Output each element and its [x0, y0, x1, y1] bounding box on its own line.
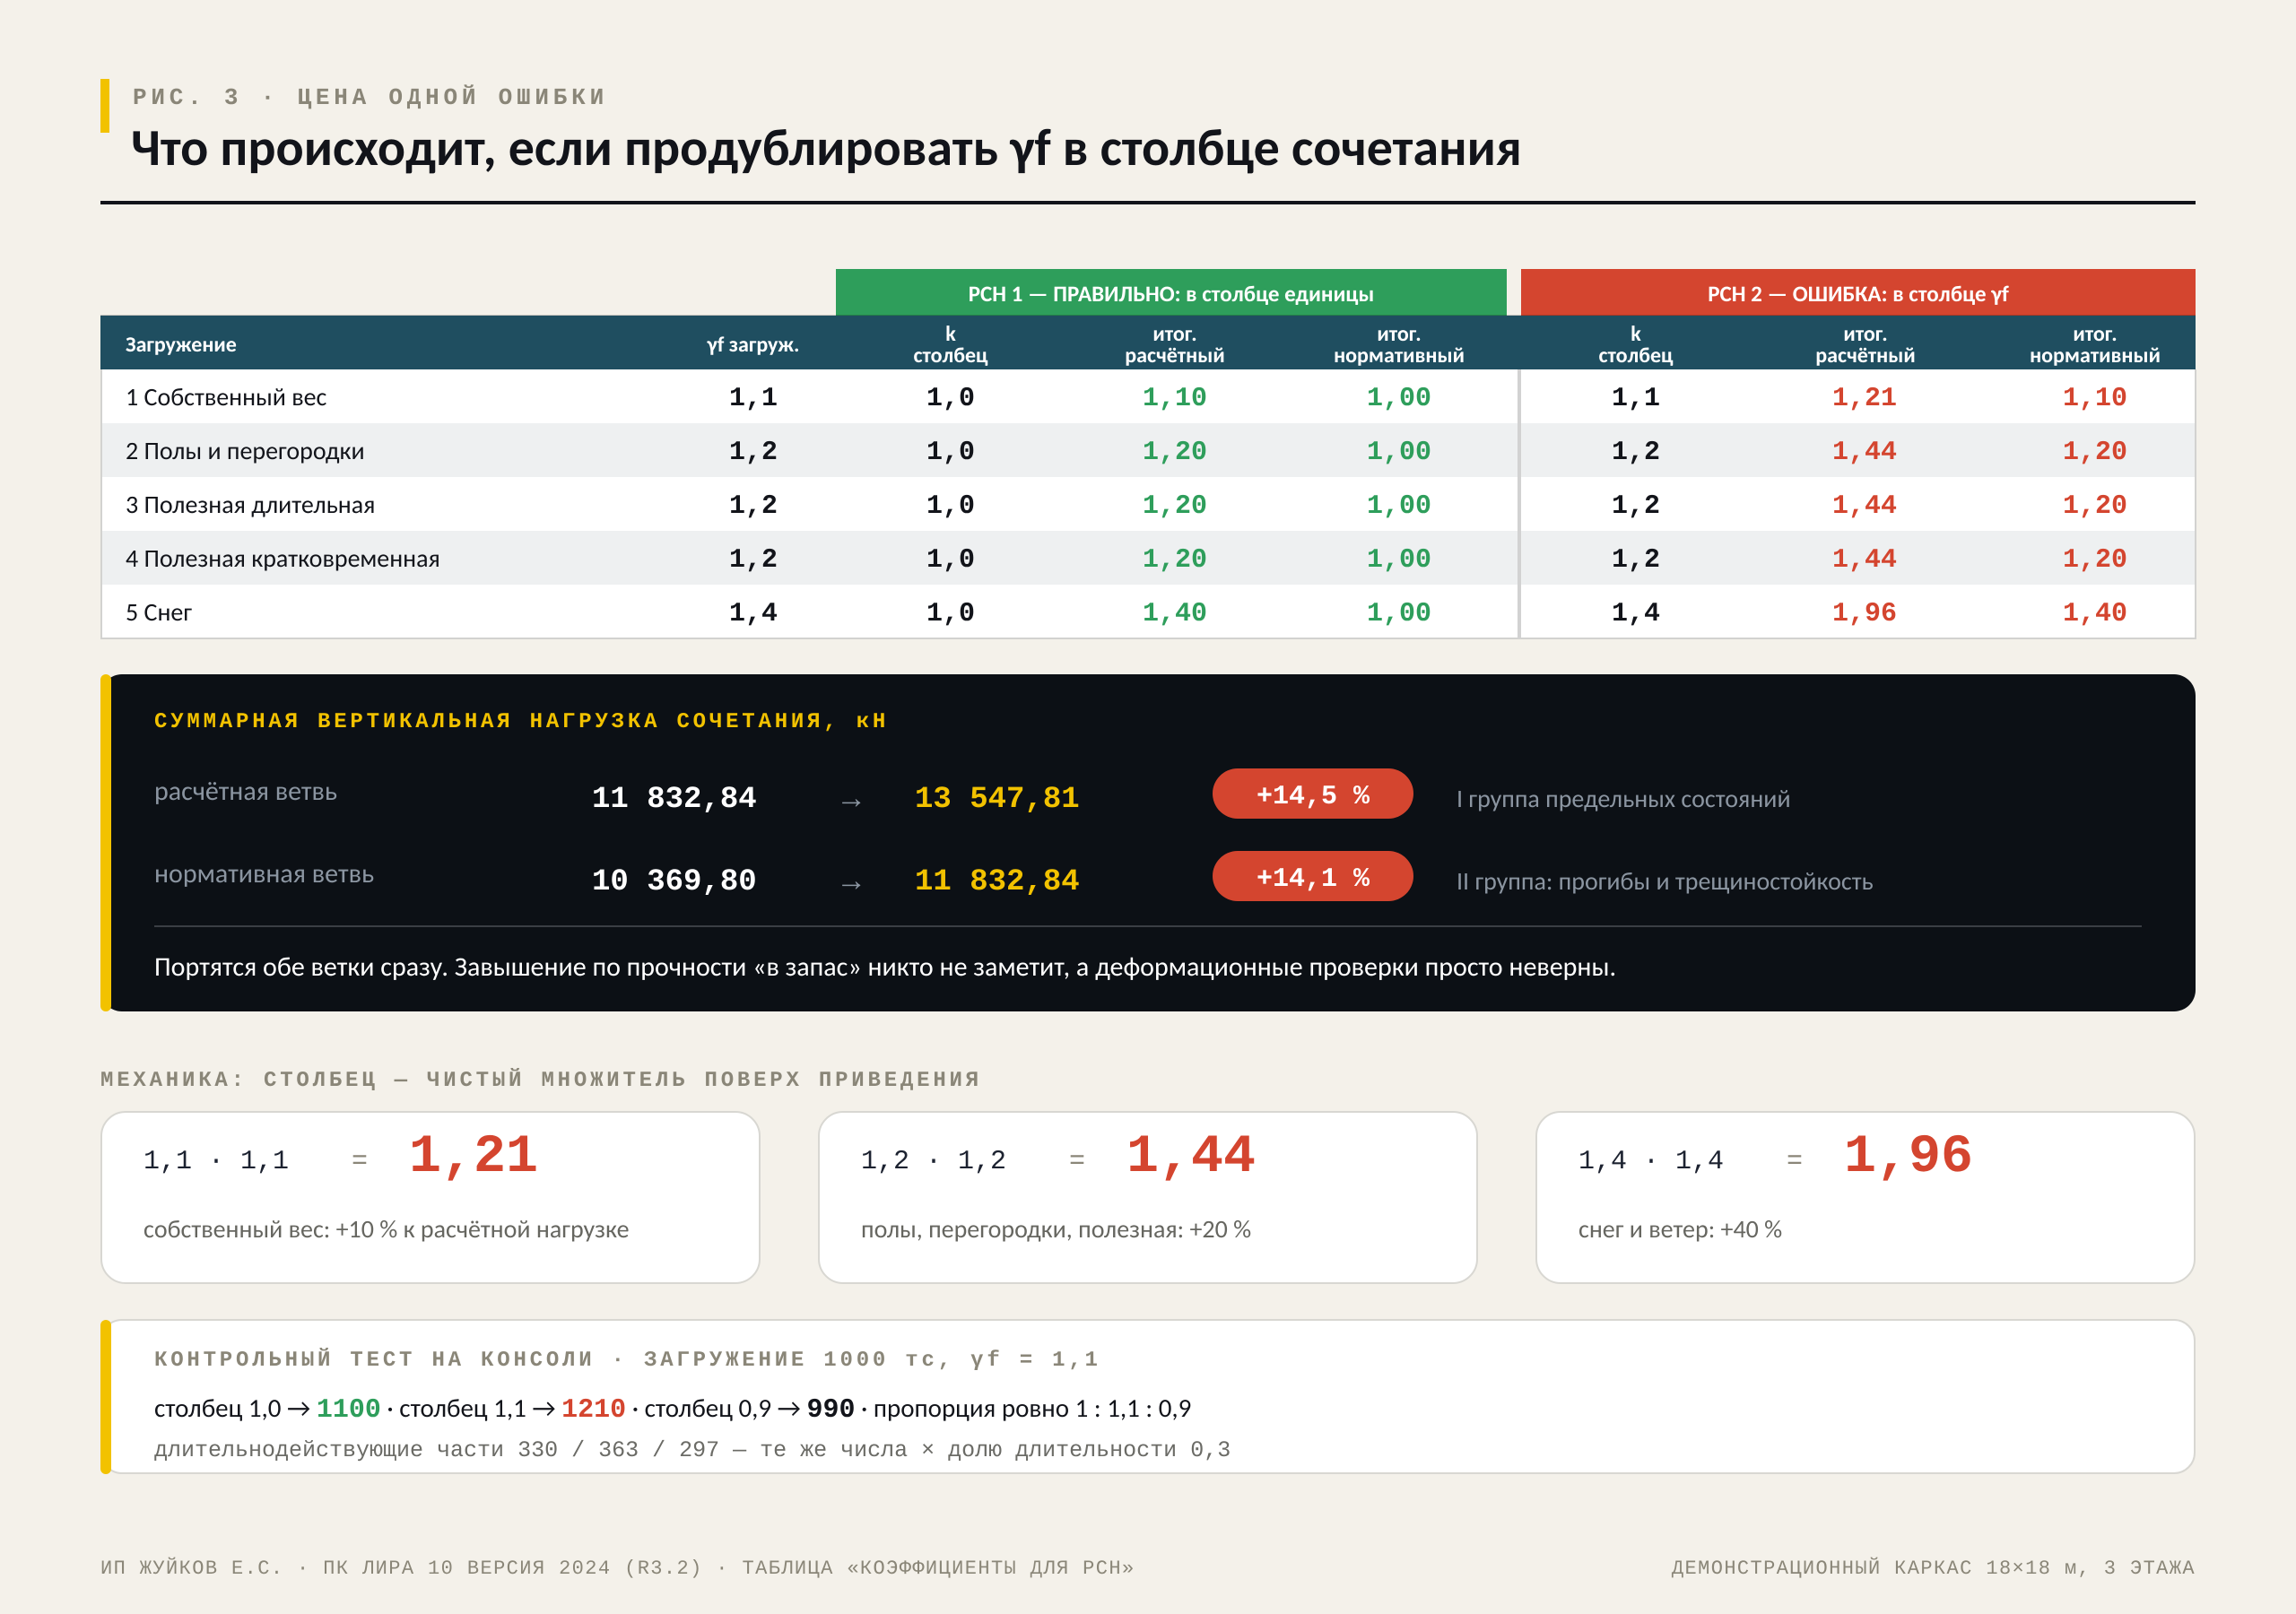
design branch row: I группа предельных состояний	[1457, 783, 1791, 814]
row 1: 1,1	[729, 384, 778, 414]
row 1: 1,00	[1367, 384, 1431, 414]
summary heading: СУММАРНАЯ ВЕРТИКАЛЬНАЯ НАГРУЗКА СОЧЕТАНИЯ, кН	[154, 710, 889, 734]
service branch row: II группа: прогибы и трещиностойкость	[1457, 865, 1874, 897]
row 2: 1,00	[1367, 438, 1431, 468]
row 4: 1,20	[2063, 545, 2127, 576]
card: 1,4 x 1,4: снег и ветер: +40 %	[1578, 1213, 1782, 1245]
comparison table	[100, 269, 2196, 639]
panel accent bar	[100, 674, 111, 1011]
service branch row: →	[842, 866, 860, 900]
card: 1,4 x 1,4: 1,96	[1844, 1127, 1973, 1188]
row 3: 1,0	[926, 491, 975, 522]
delta pill	[1213, 851, 1413, 901]
design branch row: 13 547,81	[915, 783, 1080, 817]
row 4: 4 Полезная кратковременная	[126, 542, 440, 574]
card: 1,2 x 1,2	[818, 1111, 1478, 1284]
row 1: 1,1	[1612, 384, 1660, 414]
test results: столбец 1,0 → 1100 · столбец 1,1 → 1210 · столбец 0,9 → 990 · пропорция ровно 1 : 1,1 : 0,9	[154, 1392, 1191, 1426]
table column header: итог.	[1152, 321, 1197, 347]
row 3: 3 Полезная длительная	[126, 489, 375, 520]
row 5	[102, 585, 2195, 638]
row 5: 1,4	[729, 599, 778, 629]
table column header: k	[1631, 321, 1641, 347]
row 1: 1,10	[2063, 384, 2127, 414]
card: 1,2 x 1,2: 1,44	[1126, 1127, 1256, 1188]
RSN 1 group header	[836, 269, 1507, 316]
control test panel	[100, 1319, 2196, 1474]
row 4: 1,00	[1367, 545, 1431, 576]
row 2: 1,0	[926, 438, 975, 468]
card: 1,1 x 1,1: 1,21	[409, 1127, 538, 1188]
design branch row: расчётная ветвь	[154, 775, 337, 808]
row 5: 1,40	[2063, 599, 2127, 629]
service branch row: 11 832,84	[915, 865, 1080, 899]
footer left: ИП ЖУЙКОВ Е.С. · ПК ЛИРА 10 ВЕРСИЯ 2024 (R3.2) · ТАБЛИЦА «КОЭФФИЦИЕНТЫ ДЛЯ РСН»	[100, 1558, 1135, 1580]
card: 1,2 x 1,2: =	[1069, 1147, 1085, 1177]
card: 1,1 x 1,1: =	[352, 1147, 368, 1177]
row 3: 1,2	[1612, 491, 1660, 522]
table column header: нормативный	[2030, 343, 2161, 369]
panel accent bar	[100, 1320, 111, 1474]
row 1	[102, 369, 2195, 423]
row 2: 1,20	[2063, 438, 2127, 468]
row 3: 1,20	[1143, 491, 1207, 522]
row 2: 1,2	[729, 438, 778, 468]
row 4: 1,20	[1143, 545, 1207, 576]
card: 1,2 x 1,2: 1,2 · 1,2	[861, 1147, 1006, 1177]
row 5: 1,00	[1367, 599, 1431, 629]
row 4: 1,2	[729, 545, 778, 576]
card: 1,1 x 1,1	[100, 1111, 761, 1284]
table column header: итог.	[1377, 321, 1422, 347]
service branch row: нормативная ветвь	[154, 857, 374, 890]
delta pill	[1213, 768, 1413, 819]
row 1: 1 Собственный вес	[126, 381, 326, 412]
table column header: итог.	[1843, 321, 1888, 347]
table column header: Загружение	[126, 332, 237, 358]
row 5: 5 Снег	[126, 596, 192, 628]
row 4: 1,2	[1612, 545, 1660, 576]
row 3: 1,00	[1367, 491, 1431, 522]
RSN 1 group header: РСН 1 — ПРАВИЛЬНО: в столбце единицы	[969, 280, 1374, 308]
table column header: столбец	[913, 343, 988, 369]
row 2: 1,2	[1612, 438, 1660, 468]
row 2: 1,20	[1143, 438, 1207, 468]
design branch row: 11 832,84	[592, 783, 757, 817]
title: Что происходит, если продублировать γf в столбце сочетания	[131, 116, 1522, 179]
card: 1,4 x 1,4	[1535, 1111, 2196, 1284]
table column header: расчётный	[1125, 343, 1225, 369]
card: 1,1 x 1,1: 1,1 · 1,1	[144, 1147, 289, 1177]
test heading: КОНТРОЛЬНЫЙ ТЕСТ НА КОНСОЛИ · ЗАГРУЖЕНИЕ 1000 тс, γf = 1,1	[154, 1349, 1101, 1373]
footer right: ДЕМОНСТРАЦИОННЫЙ КАРКАС 18×18 м, 3 ЭТАЖА	[1672, 1558, 2196, 1580]
table column header: расчётный	[1815, 343, 1916, 369]
row 1: 1,21	[1832, 384, 1897, 414]
design branch row	[154, 768, 1791, 819]
table column header: нормативный	[1334, 343, 1465, 369]
header accent bar	[100, 79, 109, 133]
RSN 2 group header: РСН 2 — ОШИБКА: в столбце γf	[1708, 280, 2009, 308]
delta pill: +14,1 %	[1257, 864, 1370, 895]
row 3: 1,2	[729, 491, 778, 522]
row 5: 1,40	[1143, 599, 1207, 629]
table column header: столбец	[1598, 343, 1674, 369]
table column header: γf загруж.	[708, 332, 799, 358]
row 2: 2 Полы и перегородки	[126, 435, 365, 466]
eyebrow: РИС. 3 · ЦЕНА ОДНОЙ ОШИБКИ	[133, 84, 608, 111]
card: 1,2 x 1,2: полы, перегородки, полезная: +20 %	[861, 1213, 1251, 1245]
design branch row: →	[842, 784, 860, 818]
card: 1,4 x 1,4: 1,4 · 1,4	[1578, 1147, 1724, 1177]
dark summary panel	[100, 674, 2196, 1011]
row 4: 1,44	[1832, 545, 1897, 576]
row 3: 1,20	[2063, 491, 2127, 522]
row 1: 1,10	[1143, 384, 1207, 414]
row 3	[102, 477, 2195, 531]
row 5: 1,0	[926, 599, 975, 629]
row 2: 1,44	[1832, 438, 1897, 468]
table column header: k	[945, 321, 956, 347]
RSN 2 group header	[1521, 269, 2196, 316]
card: 1,4 x 1,4: =	[1787, 1147, 1803, 1177]
table column header: итог.	[2073, 321, 2118, 347]
summary conclusion: Портятся обе ветки сразу. Завышение по прочности «в запас» никто не заметит, а деформационные проверки просто неверны.	[154, 950, 1616, 984]
service branch row	[154, 851, 1874, 901]
row 3: 1,44	[1832, 491, 1897, 522]
service branch row: 10 369,80	[592, 865, 757, 899]
delta pill: +14,5 %	[1257, 782, 1370, 812]
mechanics section label: МЕХАНИКА: СТОЛБЕЦ — ЧИСТЫЙ МНОЖИТЕЛЬ ПОВЕРХ ПРИВЕДЕНИЯ	[100, 1069, 982, 1093]
card: 1,1 x 1,1: собственный вес: +10 % к расчётной нагрузке	[144, 1213, 630, 1245]
row 5: 1,96	[1832, 599, 1897, 629]
test note: длительнодействующие части 330 / 363 / 297 — те же числа × долю длительности 0,3	[154, 1437, 1231, 1463]
row 1: 1,0	[926, 384, 975, 414]
row 4: 1,0	[926, 545, 975, 576]
row 5: 1,4	[1612, 599, 1660, 629]
row 2	[102, 423, 2195, 477]
table column header	[100, 316, 2196, 369]
row 4	[102, 531, 2195, 585]
